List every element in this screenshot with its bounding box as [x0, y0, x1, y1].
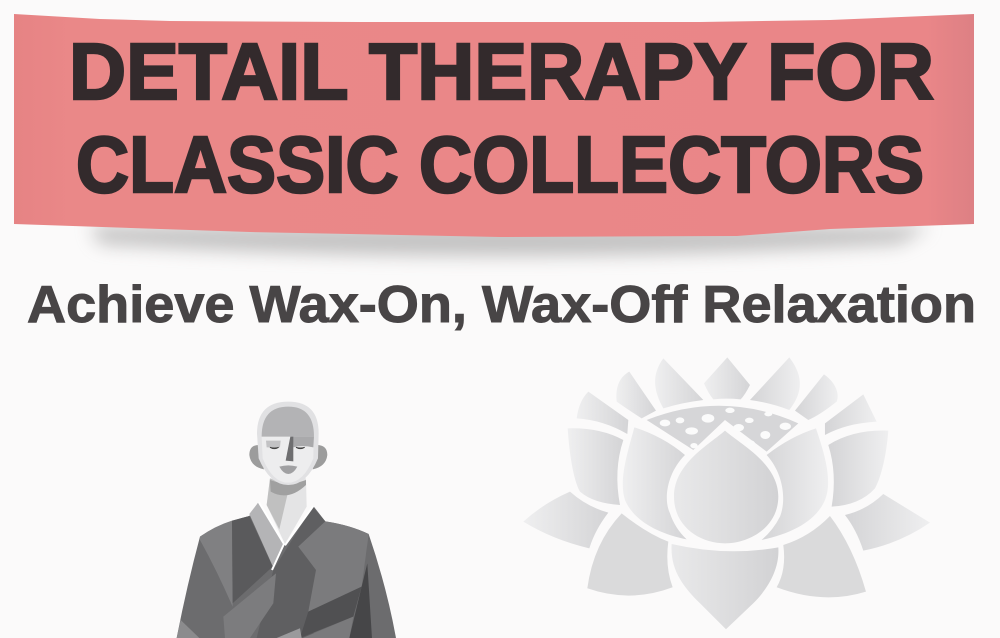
title text: DETAIL THERAPY FOR	[69, 27, 934, 116]
inner petals	[623, 427, 828, 540]
banner shadow	[90, 226, 930, 256]
right chest dark	[257, 507, 325, 638]
subtitle: Achieve Wax-On, Wax-Off Relaxation	[27, 276, 976, 334]
illustration: monk	[177, 402, 396, 638]
robe	[177, 502, 396, 638]
eyes	[270, 447, 305, 449]
white collar line	[259, 502, 313, 570]
seed pod	[647, 406, 798, 452]
forehead	[262, 407, 314, 437]
nose	[286, 437, 293, 461]
lower dark	[300, 587, 362, 638]
lower petals	[523, 492, 930, 629]
right shoulder panel	[298, 521, 369, 612]
illustration: lotus	[523, 357, 930, 629]
collar	[249, 502, 284, 566]
left shoulder	[200, 521, 233, 607]
lips	[279, 465, 297, 474]
back petals	[577, 357, 877, 435]
title text: CLASSIC COLLECTORS	[76, 120, 924, 209]
neck	[267, 478, 307, 544]
face	[262, 437, 314, 483]
centre petal	[674, 431, 778, 543]
side petals	[568, 428, 888, 507]
title banner	[14, 14, 974, 237]
head	[257, 402, 319, 485]
sleeve band	[223, 573, 276, 638]
title text	[69, 27, 934, 209]
ears	[249, 445, 327, 469]
dark chest panel	[232, 516, 273, 603]
